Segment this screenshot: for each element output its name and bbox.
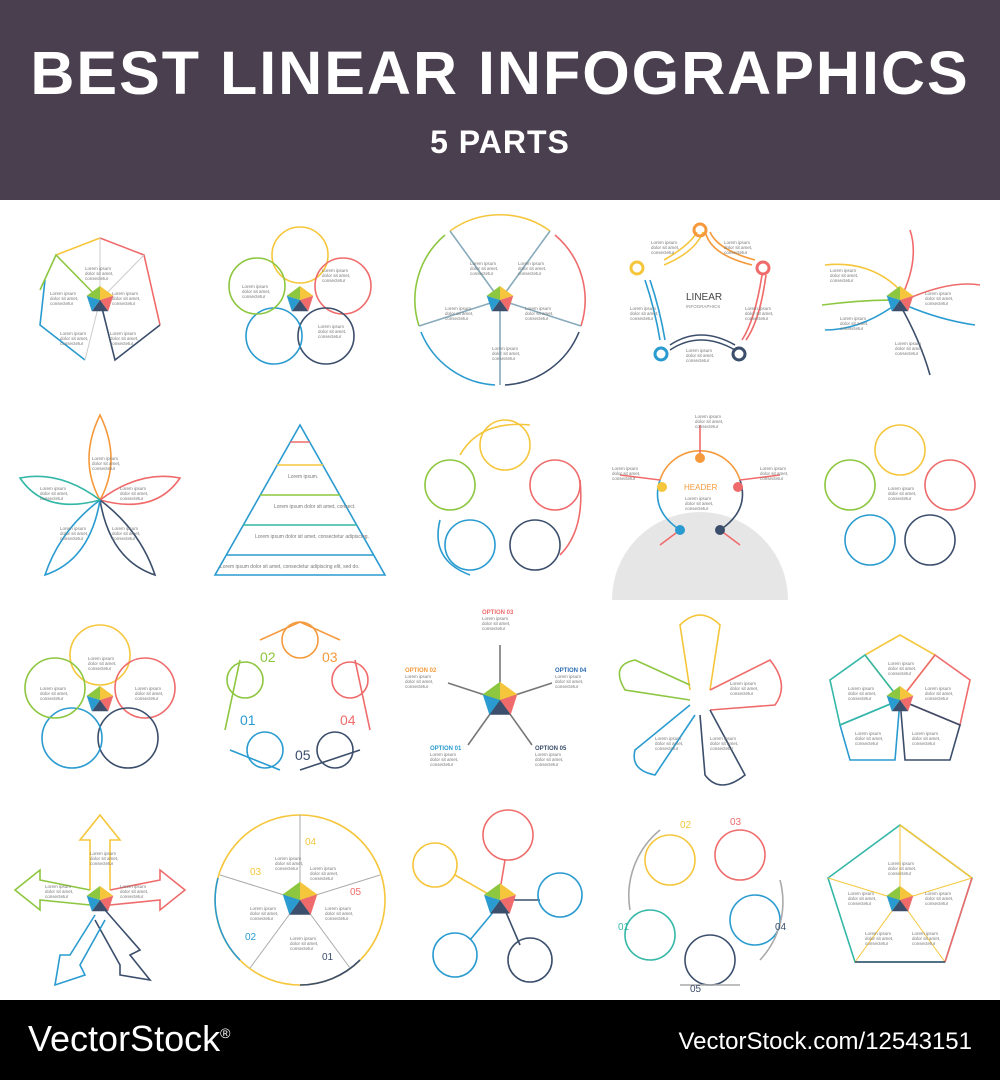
tile 14: swirl loops: [619, 615, 781, 785]
tile 6: flower petals: [20, 415, 180, 575]
tile 9: header with globe: HEADER: [684, 483, 718, 492]
tile 12: pentagon with circles and numbers: [225, 622, 370, 770]
tile 17: big circle with numbers: 03: [250, 867, 262, 878]
tile 19: ring of circles: 04: [775, 922, 787, 933]
tile 4: linear infographics pentagon: INFOGRAPHICS: [686, 304, 720, 309]
tile 1: pentagon arrows: [40, 238, 160, 360]
tile 7: pyramid: Lorem ipsum.: [288, 474, 318, 480]
tile 16: arrows: [15, 815, 185, 985]
header banner: [0, 0, 1000, 200]
tile 13: options star: OPTION 02: [405, 668, 437, 674]
tile 4: linear infographics pentagon: LINEAR: [686, 292, 722, 303]
tile 4: linear infographics pentagon: [630, 224, 773, 363]
tile 8: circles around: [425, 420, 581, 575]
grid of infographic tiles: [14, 214, 980, 995]
tile 7: pyramid: Lorem ipsum dolor sit amet, consectetur adipiscing.: [255, 534, 369, 540]
tile 18: circles on stems: [413, 810, 582, 982]
tile 12: pentagon with circles and numbers: 01: [240, 712, 256, 728]
tile 17: big circle with numbers: [215, 815, 385, 985]
tile 17: big circle with numbers: 01: [322, 952, 334, 963]
tile 19: ring of circles: [618, 817, 787, 995]
footer logo: VectorStock®: [28, 1018, 230, 1059]
subtitle: 5 PARTS: [430, 124, 570, 160]
tile 13: options star: [405, 610, 587, 767]
tile 19: ring of circles: 05: [690, 984, 702, 995]
tile 13: options star: OPTION 01: [430, 746, 462, 752]
tile 11: circle petals with pie: [25, 625, 175, 768]
tile 3: big segmented circle: [415, 215, 585, 385]
tile 19: ring of circles: 01: [618, 922, 630, 933]
tile 9: header with globe: [612, 414, 788, 600]
tile 19: ring of circles: 03: [730, 817, 742, 828]
tile 12: pentagon with circles and numbers: 02: [260, 649, 276, 665]
tile 7: pyramid: Lorem ipsum dolor sit amet, consect.: [274, 504, 356, 510]
tile 17: big circle with numbers: 05: [350, 887, 362, 898]
tile 10: five circles: [825, 425, 975, 565]
tile 12: pentagon with circles and numbers: 04: [340, 712, 356, 728]
tile 19: ring of circles: 02: [680, 820, 692, 831]
footer: [0, 1000, 1000, 1080]
tile 7: pyramid: [215, 425, 385, 575]
tile 5: radiating curves: [822, 230, 980, 375]
footer url: VectorStock.com/12543151: [678, 1028, 972, 1055]
tile 13: options star: OPTION 03: [482, 610, 514, 616]
tile 13: options star: OPTION 04: [555, 668, 587, 674]
tile 12: pentagon with circles and numbers: 03: [322, 649, 338, 665]
tile 15: segmented pentagon: [830, 635, 970, 760]
tile 2: swirl circles: [229, 227, 371, 364]
tile 20: big pentagon: [828, 825, 972, 962]
tile 7: pyramid: Lorem ipsum dolor sit amet, consectetur adipiscing elit, sed do.: [220, 564, 360, 570]
tile 17: big circle with numbers: 02: [245, 932, 257, 943]
tile 13: options star: OPTION 05: [535, 746, 567, 752]
tile 12: pentagon with circles and numbers: 05: [295, 747, 311, 763]
title: BEST LINEAR INFOGRAPHICS: [30, 39, 970, 107]
tile 17: big circle with numbers: 04: [305, 837, 317, 848]
